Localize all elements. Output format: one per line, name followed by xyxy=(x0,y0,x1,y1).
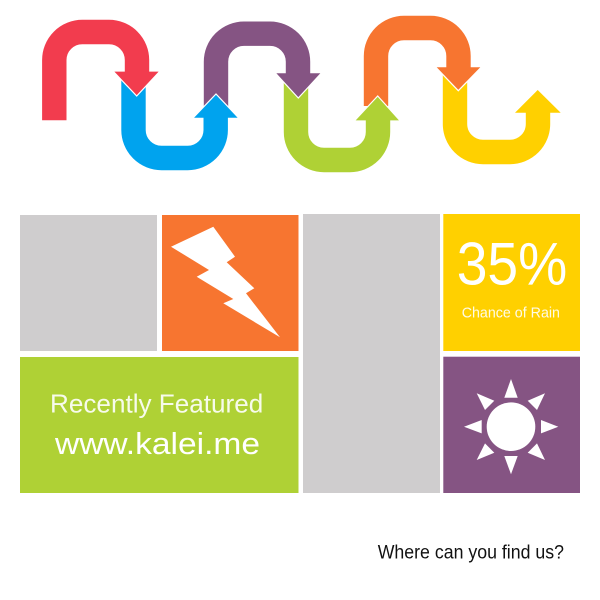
panel: grey tall xyxy=(303,214,440,493)
arrow: red xyxy=(54,32,160,120)
icon: lightning bolt xyxy=(171,227,280,337)
arrow: green xyxy=(296,78,400,160)
arrow: yellow xyxy=(455,72,561,152)
stat: 35%: 35% xyxy=(457,230,567,297)
arrow: purple xyxy=(216,34,322,112)
text: website: www.kalei.me xyxy=(54,426,260,461)
label: chance of rain: Chance of Rain xyxy=(462,306,560,322)
arrow chain xyxy=(54,28,561,160)
panel: sun xyxy=(443,357,580,493)
panel: rain chance xyxy=(443,214,580,351)
panel: orange lightning xyxy=(162,215,298,351)
panel: grey top left xyxy=(20,215,157,351)
arrow: blue xyxy=(134,75,239,158)
caption: Where can you find us? xyxy=(378,542,564,563)
icon: sun xyxy=(464,379,558,474)
text: recently featured: Recently Featured xyxy=(50,388,263,418)
panel: recently featured xyxy=(20,357,298,493)
arrow: orange xyxy=(376,28,482,106)
